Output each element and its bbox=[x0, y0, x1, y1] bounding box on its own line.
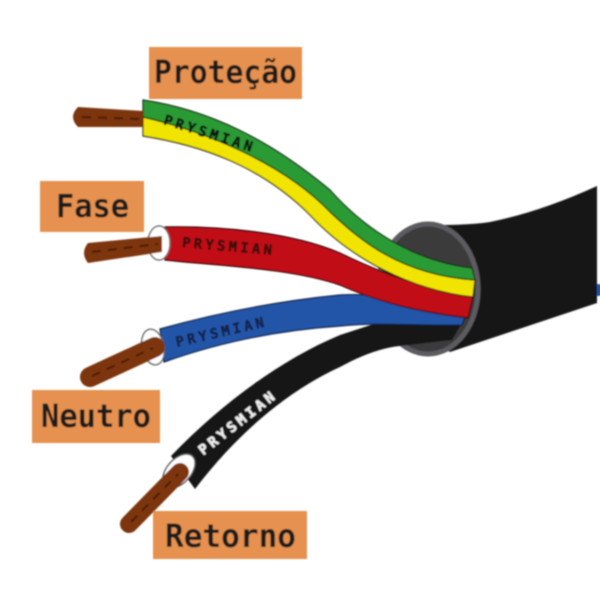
label: Fase bbox=[40, 181, 144, 232]
label: Neutro: Neutro bbox=[41, 397, 151, 435]
wire: Proteção (green and yellow) bbox=[73, 100, 475, 297]
brand text on red wire: PRYSMIAN bbox=[181, 235, 273, 259]
label: Neutro bbox=[32, 390, 160, 443]
outer cable sheath bbox=[430, 186, 600, 352]
label: Retorno bbox=[153, 511, 307, 559]
label: Proteção bbox=[149, 47, 302, 99]
label: Retorno: Retorno bbox=[165, 517, 296, 555]
label: Proteção: Proteção bbox=[154, 53, 297, 91]
label: Fase: Fase bbox=[56, 187, 129, 225]
brand text on green wire: PRYSMIAN bbox=[162, 113, 254, 155]
brand text on blue wire: PRYSMIAN bbox=[174, 315, 266, 351]
wire: Fase (red) bbox=[84, 226, 473, 318]
brand text on black wire: PRYSMIAN bbox=[196, 389, 278, 459]
wire: Retorno (black) bbox=[129, 322, 462, 524]
wire: Neutro (blue) bbox=[90, 295, 465, 377]
cable opening ring bbox=[378, 224, 478, 354]
